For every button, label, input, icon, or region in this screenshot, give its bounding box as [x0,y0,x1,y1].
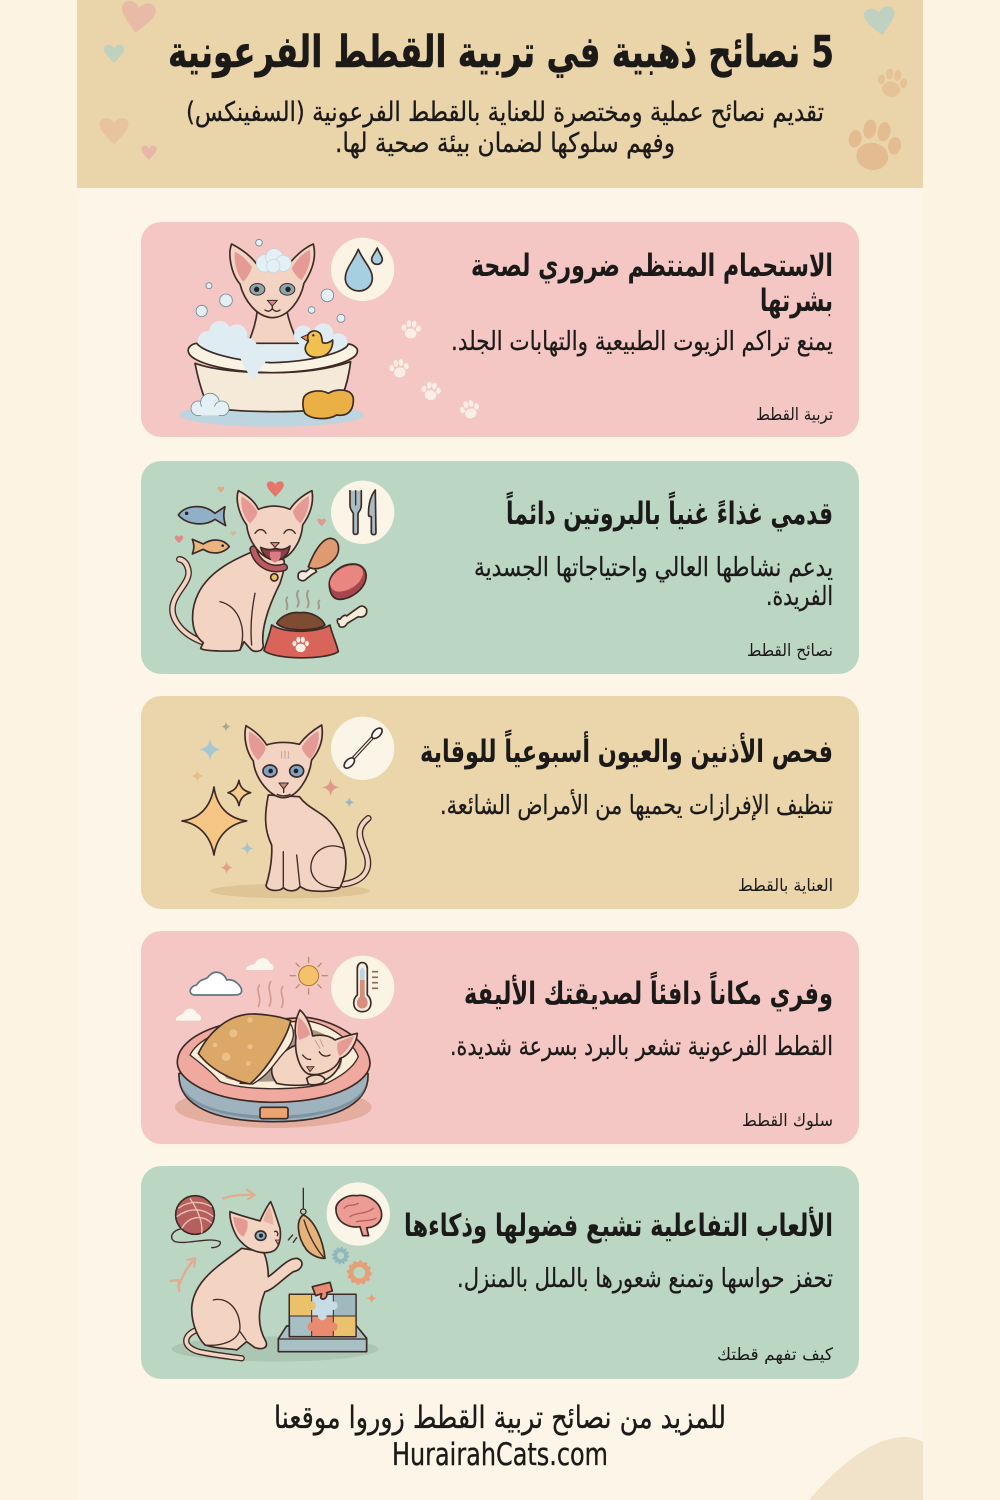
panel: interactive games tip [141,1166,859,1379]
body text: food: الفريدة. [766,582,833,612]
panel: ears and eyes tip [141,696,859,909]
body text: bathing: يمنع تراكم الزيوت الطبيعية والتهابات الجلد. [451,327,833,357]
footer call to action [274,1400,726,1473]
cat bed [177,1017,370,1122]
illustration: playful cat with puzzle [170,1182,390,1362]
illustration: happy cat with food [173,481,394,658]
icon: brain [327,1182,390,1246]
footer call to action: للمزيد من نصائح تربية القطط زوروا موقعنا [274,1400,726,1436]
cat tail [173,559,202,642]
clouds [176,958,274,1021]
tag: bathing: تربية القطط [756,405,833,425]
heading: games: الألعاب التفاعلية تشبع فضولها وذكاءها [404,1206,833,1244]
heat waves [258,982,283,1007]
footer call to action: HurairahCats.com [392,1437,608,1473]
hearts [175,481,326,543]
feather toy [288,1188,325,1258]
rubber duck [301,331,333,357]
header decorations: hearts and paws [100,0,909,174]
subtitle [186,97,824,159]
sponge [303,390,353,419]
header banner [77,0,923,188]
heading: ears and eyes: فحص الأذنين والعيون أسبوعياً للوقاية [420,729,833,770]
orange fish [192,539,229,554]
heading: bathing: بشرتها [760,283,833,319]
heading: bathing [471,248,833,319]
tag: ears and eyes: العناية بالقطط [738,876,833,896]
blanket [198,1014,293,1084]
body text: food [474,553,833,612]
cat body [266,795,346,891]
tag: food: نصائح القطط [747,641,833,661]
body text: warmth: القطط الفرعونية تشعر بالبرد بسرعة شديدة. [450,1032,833,1062]
cat head [245,725,322,798]
corner decoration [809,1437,923,1500]
cat collar [253,549,284,568]
heading: warmth: وفري مكاناً دافئاً لصديقتك الأليفة [464,971,833,1012]
gears [333,1248,377,1303]
body text: games: تحفز حواسها وتمنع شعورها بالملل بالمنزل. [457,1264,833,1294]
icon: cotton swab [331,717,394,780]
panel: food tip [141,461,859,674]
illustration: sitting cat with sparkles [182,717,394,898]
body text: food: يدعم نشاطها العالي واحتياجاتها الجسدية [474,553,833,583]
blue fish [178,507,226,526]
tub foam [198,321,348,363]
icon: water drops [331,238,394,301]
icon: fork and knife [331,481,394,544]
tag: warmth: سلوك القطط [742,1111,833,1131]
steak [329,564,366,599]
body text: ears and eyes: تنظيف الإفرازات يحميها من الأمراض الشائعة. [440,788,833,821]
icon: thermometer [331,956,394,1019]
steam [286,591,319,609]
cat tail [186,1330,242,1358]
illustration: cat in bathtub [179,238,481,427]
heading: food: قدمي غذاءً غنياً بالبروتين دائماً [506,491,833,532]
subtitle: وفهم سلوكها لضمان بيئة صحية لها. [335,128,675,159]
motion arrows [170,1190,255,1291]
cat body [192,1248,302,1350]
yarn ball [172,1196,220,1248]
puzzle on tray [278,1282,367,1352]
drumstick [298,538,339,581]
panel: warmth tip [141,931,859,1144]
panel: bathing tip [141,222,859,437]
tag: games: كيف تفهم قطتك [717,1345,834,1365]
bone [337,606,367,627]
illustration: cat sleeping in bed [175,956,394,1128]
foam on head [256,249,291,273]
cat head and neck [230,244,314,343]
sparkles [182,722,354,874]
cat body [193,551,284,651]
paw prints [388,320,481,421]
sun [290,957,327,994]
cat head [230,1202,280,1253]
subtitle: تقديم نصائح عملية ومختصرة للعناية بالقطط الفرعونية (السفينكس) [186,97,824,128]
food bowl [264,613,338,658]
cat head [237,491,312,562]
foam beside tub [191,393,229,416]
heading: bathing: الاستحمام المنتظم ضروري لصحة [471,248,833,284]
cat tail [343,818,368,884]
bathtub [188,343,357,412]
bubbles [196,239,345,322]
sleeping cat [272,1010,357,1085]
